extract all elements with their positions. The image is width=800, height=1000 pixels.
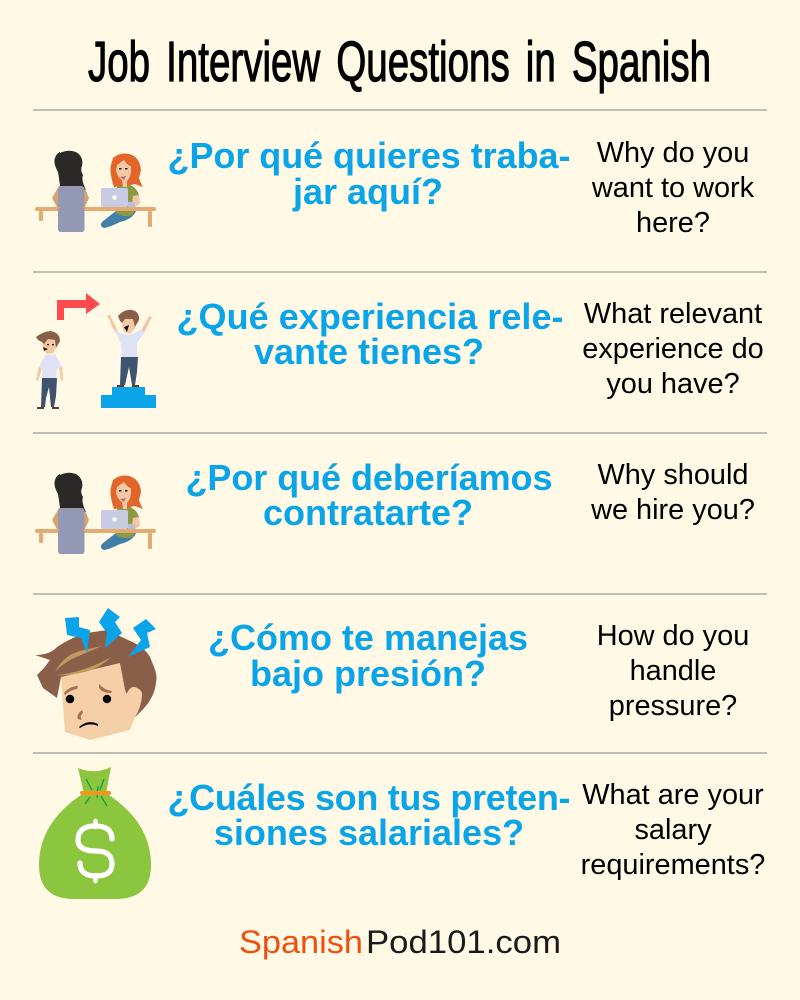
row 3: why hire you [35,457,755,554]
question: siones salariales? [214,812,524,853]
translation: we hire you? [590,494,755,526]
question [168,135,570,212]
translation: pressure? [609,690,737,722]
icon: man stepping up [36,293,156,409]
translation: Why should [598,459,748,491]
logo text: Pod101.com [366,924,561,960]
translation: What are your [582,779,764,811]
man right [107,310,152,387]
translation [597,620,749,722]
translation: Why do you [597,137,749,169]
icon: interview at desk [35,151,156,232]
translation: you have? [606,368,740,400]
translation: here? [636,207,710,239]
translation [590,459,755,526]
question: vante tienes? [254,331,484,372]
man left [36,331,63,409]
arrow [57,293,100,320]
question: contratarte? [263,492,473,533]
question: ¿Cuáles son tus preten- [168,777,570,818]
translation [581,779,765,881]
icon: money bag [39,767,151,899]
translation: What relevant [584,298,762,330]
question [186,457,552,533]
translation [591,137,755,239]
translation: salary [634,814,712,846]
question [176,296,564,372]
translation: How do you [597,620,749,652]
row 1: why work here [35,135,755,239]
icon: stressed head [35,608,156,740]
logo text: Spanish [239,924,363,960]
row 4: handle pressure [35,608,749,740]
question [168,777,570,853]
translation: experience do [582,333,764,365]
translation [582,298,764,400]
question [208,617,528,694]
logo text [239,924,561,960]
row 2: relevant experience [36,293,764,409]
translation: want to work [591,172,755,204]
question: ¿Por qué quieres traba- [168,135,570,176]
translation: handle [630,655,716,687]
question: ¿Qué experiencia rele- [176,296,564,337]
question: ¿Por qué deberíamos [186,457,552,498]
podium [101,387,156,408]
question: bajo presión? [250,653,486,694]
question: jar aquí? [292,171,443,212]
row 5: salary [39,767,765,899]
question: ¿Cómo te manejas [208,617,528,658]
icon: interview at desk [35,473,156,554]
translation: requirements? [581,849,765,881]
